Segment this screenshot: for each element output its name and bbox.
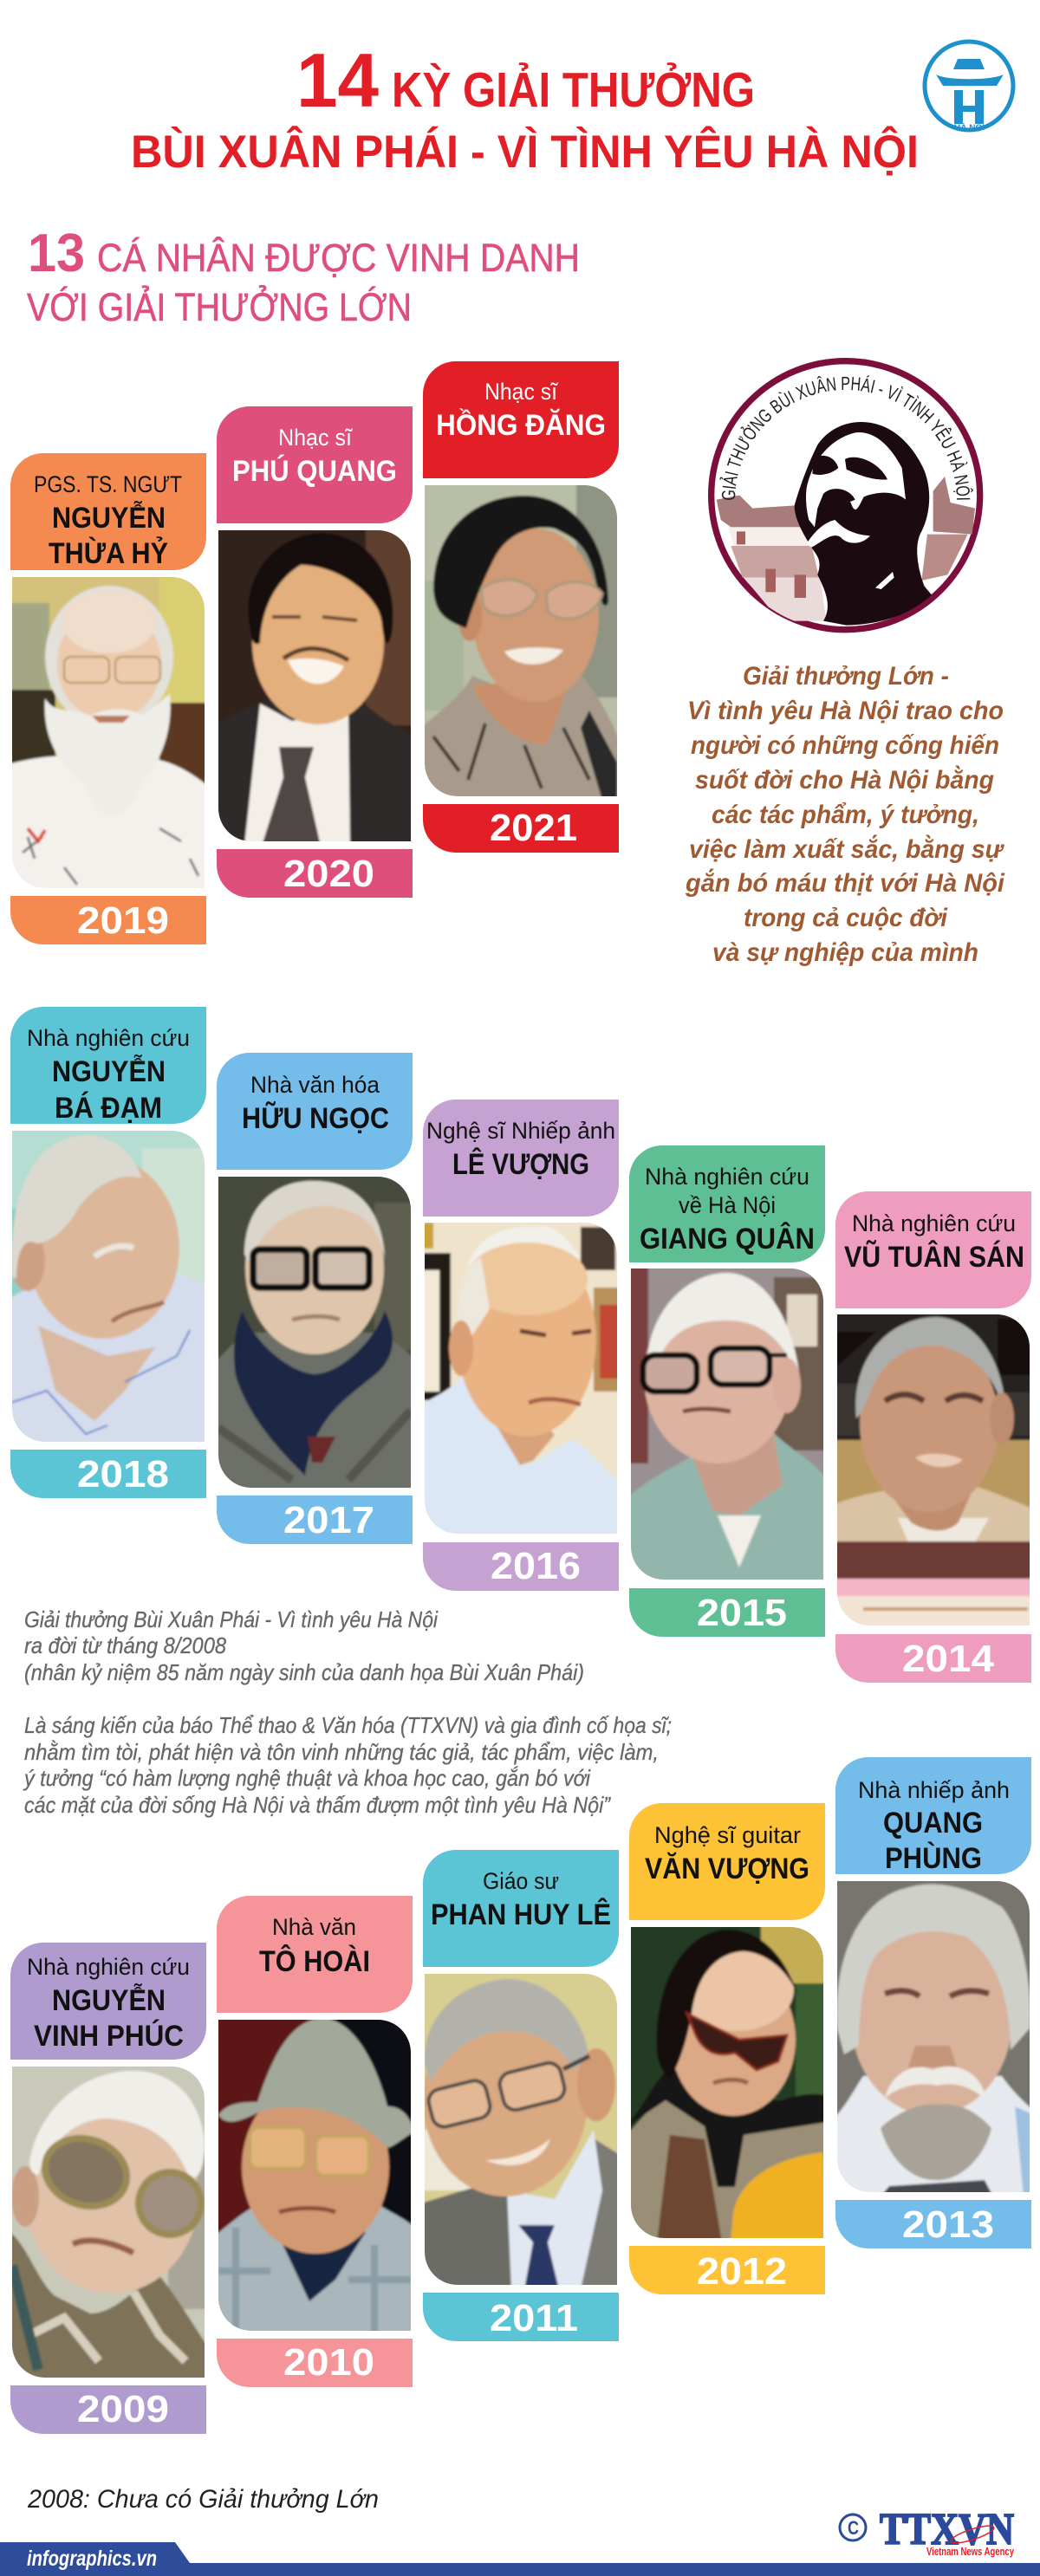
panel: 2021 Hồng Đăng: 2021	[490, 807, 577, 849]
panel: 2019 Nguyễn Thừa Hỷ: 2019	[77, 899, 169, 942]
panel: 2015 Giang Quân: Nhà nghiên cứu	[645, 1164, 809, 1190]
panel: 2015 Giang Quân: 2015	[697, 1592, 787, 1634]
panel: 2020 Phú Quang: Nhạc sĩ	[278, 425, 353, 451]
panel: 2018 Nguyễn Bá Đạm	[8, 1007, 209, 1498]
panel: 2016 Lê Vượng	[420, 1100, 621, 1591]
icon: copyright: C	[848, 2517, 859, 2539]
panel: 2014 Vũ Tuân Sán: 2014	[902, 1638, 995, 1680]
panel: 2018 Nguyễn Bá Đạm: BÁ ĐẠM	[55, 1092, 162, 1125]
note: about the award	[23, 1606, 672, 1818]
panel: 2016 Lê Vượng: LÊ VƯỢNG	[452, 1148, 589, 1181]
photo: Hồng Đăng	[420, 481, 621, 801]
panel: 2019 Nguyễn Thừa Hỷ: THỪA HỶ	[49, 537, 168, 570]
description text: các tác phẩm, ý tưởng,	[712, 801, 979, 829]
panel: 2012 Văn Vượng: Nghệ sĩ guitar	[654, 1822, 801, 1848]
panel: 2014 Vũ Tuân Sán: VŨ TUÂN SÁN	[844, 1241, 1024, 1274]
panel: 2009 Nguyễn Vinh Phúc: Nhà nghiên cứu	[27, 1954, 190, 1980]
panel: 2019 Nguyễn Thừa Hỷ: PGS. TS. NGƯT	[34, 471, 182, 497]
panel: 2021 Hồng Đăng: HỒNG ĐĂNG	[436, 409, 606, 442]
photo: Nguyễn Bá Đạm	[8, 1126, 209, 1446]
panel: 2014 Vũ Tuân Sán	[833, 1191, 1034, 1683]
panel: 2014 Vũ Tuân Sán: Nhà nghiên cứu	[852, 1210, 1016, 1236]
panel: 2016 Lê Vượng: 2016	[491, 1545, 581, 1587]
title: 14	[296, 37, 379, 123]
note: about the award: (nhân kỷ niệm 85 năm ngày sinh của danh họa Bùi Xuân Phái)	[24, 1659, 584, 1685]
footer bar: infographics.vn	[27, 2547, 157, 2571]
panel: 2015 Giang Quân	[627, 1145, 828, 1637]
panel: 2020 Phú Quang: PHÚ QUANG	[232, 455, 397, 488]
panel: 2013 Quang Phùng: Nhà nhiếp ảnh	[858, 1777, 1010, 1803]
emblem text: GIẢI THƯỞNG BÙI XUÂN PHÁI - VÌ TÌNH YÊU HÀ NỘI	[719, 375, 973, 500]
photo: Quang Phùng	[833, 1877, 1034, 2196]
title: KỲ GIẢI THƯỞNG	[392, 62, 755, 118]
subtitle	[27, 224, 580, 329]
panel: 2020 Phú Quang	[214, 406, 418, 898]
panel: 2010 Tô Hoài	[214, 1896, 418, 2387]
panel: 2013 Quang Phùng: 2013	[902, 2203, 994, 2246]
photo: Phú Quang	[214, 526, 418, 846]
panel: 2010 Tô Hoài: TÔ HOÀI	[259, 1944, 370, 1978]
panel: 2020 Phú Quang: 2020	[283, 853, 374, 895]
panel: 2019 Nguyễn Thừa Hỷ	[8, 453, 211, 944]
description text: và sự nghiệp của mình	[712, 938, 978, 967]
panel: 2009 Nguyễn Vinh Phúc: VINH PHÚC	[34, 2020, 184, 2053]
panel: 2021 Hồng Đăng	[420, 361, 621, 853]
photo: Hữu Ngọc	[214, 1172, 415, 1492]
photo: Tô Hoài	[214, 2015, 418, 2335]
panel: 2013 Quang Phùng: QUANG	[883, 1807, 983, 1840]
panel: 2015 Giang Quân: GIANG QUÂN	[640, 1223, 815, 1256]
description text: gắn bó máu thịt với Hà Nội	[685, 868, 1005, 898]
buildings in emblem	[717, 477, 975, 621]
icon: Hanoi logo: HÀ NỘI	[954, 122, 985, 132]
footer bar	[0, 2542, 1040, 2576]
panel: 2018 Nguyễn Bá Đạm: Nhà nghiên cứu	[27, 1025, 190, 1051]
panel: 2018 Nguyễn Bá Đạm: 2018	[77, 1453, 169, 1496]
description text: Giải thưởng Lớn -	[743, 662, 949, 691]
panel: 2013 Quang Phùng: PHÙNG	[885, 1842, 982, 1875]
photo: Vũ Tuân Sán	[833, 1310, 1034, 1631]
emblem: award logo	[712, 361, 980, 630]
description text: trong cả cuộc đời	[744, 904, 948, 932]
photo: Giang Quân	[627, 1264, 828, 1584]
panel: 2017 Hữu Ngọc: 2017	[283, 1499, 374, 1541]
subtitle: VỚI GIẢI THƯỞNG LỚN	[27, 285, 412, 329]
note: about the award: ra đời từ tháng 8/2008	[24, 1632, 226, 1658]
panel: 2009 Nguyễn Vinh Phúc: NGUYỄN	[52, 1984, 166, 2017]
photo: Văn Vượng	[627, 1923, 830, 2242]
panel: 2017 Hữu Ngọc	[214, 1053, 415, 1544]
note: about the award: nhằm tìm tòi, phát hiện và tôn vinh những tác giả, tác phẩm, việc làm,	[24, 1739, 659, 1765]
photo: Nguyễn Vinh Phúc	[8, 2062, 209, 2382]
photo: Nguyễn Thừa Hỷ	[8, 573, 211, 892]
description text: người có những cống hiến	[691, 731, 999, 760]
panel: 2012 Văn Vượng: VĂN VƯỢNG	[645, 1853, 809, 1885]
panel: 2009 Nguyễn Vinh Phúc	[8, 1943, 209, 2434]
panel: 2017 Hữu Ngọc: Nhà văn hóa	[250, 1072, 380, 1098]
panel: 2011 Phan Huy Lê: PHAN HUY LÊ	[431, 1898, 611, 1931]
panel: 2011 Phan Huy Lê: Giáo sư	[483, 1868, 559, 1894]
panel: 2012 Văn Vượng: 2012	[697, 2250, 787, 2293]
panel: 2010 Tô Hoài: 2010	[283, 2341, 374, 2384]
panel: 2010 Tô Hoài: Nhà văn	[272, 1914, 356, 1940]
panel: 2009 Nguyễn Vinh Phúc: 2009	[77, 2388, 169, 2430]
icon: copyright	[840, 2514, 866, 2540]
note: about the award: các mặt của đời sống Hà Nội và thấm đượm một tình yêu Hà Nội”	[24, 1792, 611, 1818]
panel: 2017 Hữu Ngọc: HỮU NGỌC	[242, 1102, 389, 1135]
description text: Vì tình yêu Hà Nội trao cho	[687, 697, 1004, 725]
logo: TTXVN: TTXVN	[880, 2505, 1014, 2554]
note: 2008 no grand prize: 2008: Chưa có Giải thưởng Lớn	[27, 2485, 379, 2514]
panel: 2011 Phan Huy Lê: 2011	[490, 2297, 578, 2339]
photo: Phan Huy Lê	[420, 1969, 621, 2289]
panel: 2016 Lê Vượng: Nghệ sĩ Nhiếp ảnh	[426, 1118, 615, 1144]
panel: 2019 Nguyễn Thừa Hỷ: NGUYỄN	[52, 502, 166, 535]
panel: 2013 Quang Phùng	[833, 1757, 1034, 2248]
note: about the award: ý tưởng “có hàm lượng nghệ thuật và khoa học cao, gắn bó với	[23, 1765, 591, 1791]
title	[131, 37, 919, 178]
note: about the award: Là sáng kiến của báo Thể thao & Văn hóa (TTXVN) và gia đình cố họa sĩ;	[24, 1712, 672, 1738]
panel: 2018 Nguyễn Bá Đạm: NGUYỄN	[52, 1055, 166, 1088]
panel: 2015 Giang Quân: về Hà Nội	[679, 1192, 776, 1218]
panel: 2011 Phan Huy Lê	[420, 1850, 621, 2341]
subtitle: 13	[28, 224, 85, 283]
title: BÙI XUÂN PHÁI - VÌ TÌNH YÊU HÀ NỘI	[131, 125, 919, 178]
subtitle: CÁ NHÂN ĐƯỢC VINH DANH	[97, 236, 580, 280]
panel: 2021 Hồng Đăng: Nhạc sĩ	[484, 379, 558, 405]
photo: Lê Vượng	[420, 1218, 621, 1538]
note: about the award: Giải thưởng Bùi Xuân Phái - Vì tình yêu Hà Nội	[24, 1606, 439, 1632]
icon: Hanoi logo	[925, 42, 1013, 132]
panel: 2012 Văn Vượng	[627, 1803, 830, 2294]
description text	[685, 662, 1005, 967]
description text: suốt đời cho Hà Nội bằng	[695, 765, 994, 795]
description text: việc làm xuất sắc, bằng sự	[689, 834, 1004, 864]
